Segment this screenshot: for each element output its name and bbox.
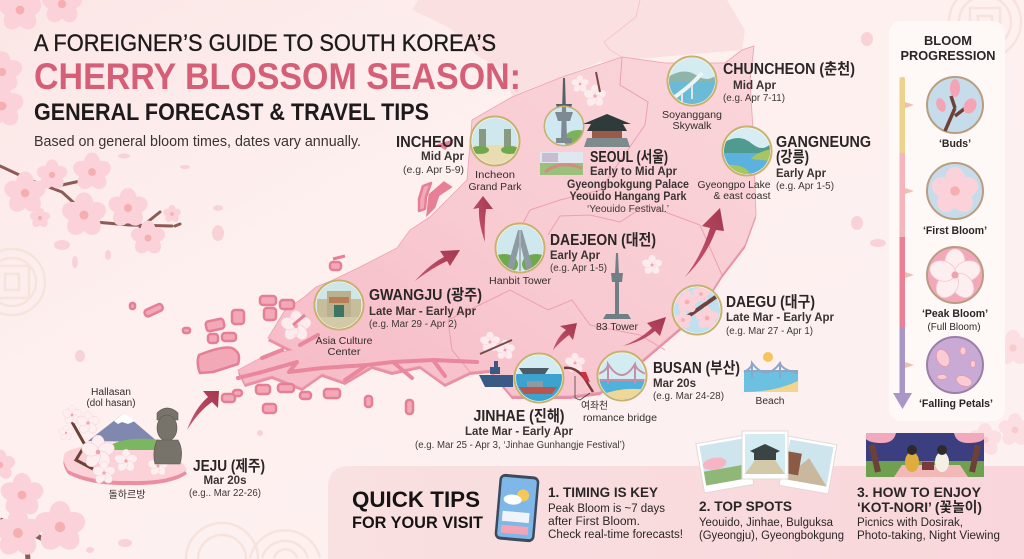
icon: Hallasan mountain [88, 413, 158, 442]
panel: quick tips [328, 431, 1024, 559]
title line 3: GENERAL FORECAST & TRAVEL TIPS [34, 99, 429, 126]
city: Gangneung: Early Apr [776, 168, 827, 180]
icon: cherry tree [72, 422, 95, 470]
icon: Asia Culture Center [314, 280, 364, 330]
icon: N Seoul Tower [544, 78, 584, 146]
city: Incheon: (e.g. Apr 5-9) [403, 165, 464, 176]
tip 1: timing: after First Bloom. [548, 516, 640, 528]
city: Gwangju: (e.g. Mar 29 - Apr 2) [369, 319, 457, 330]
blossoms: right edge [967, 330, 1024, 458]
city: Busan: (e.g. Mar 24-28) [653, 391, 724, 402]
city: Gangneung: (강릉) [776, 148, 809, 166]
city: Jeju: JEJU (제주) [193, 457, 265, 475]
city: Jeju: 돌하르방 [108, 488, 146, 501]
coast shadow [238, 49, 756, 399]
city: Chuncheon: Mid Apr [733, 80, 777, 92]
city: Jinhae: (e.g. Mar 25 - Apr 3, ‘Jinhae Gunhangje Festival’) [415, 440, 625, 451]
icon: Gyeongpo Lake [722, 126, 772, 176]
city: Seoul: Yeouido Hangang Park [570, 191, 687, 203]
tip 2: top spots: (Gyeongju), Gyeongbokgung [699, 530, 844, 542]
tip 2: top spots: Yeouido, Jinhae, Bulguksa [699, 517, 834, 529]
city: Incheon: Grand Park [468, 182, 523, 193]
landmark: Yeojwacheon romance bridge: romance bridge [583, 413, 657, 424]
landmark: 83 Tower [596, 253, 639, 333]
blossom on map [279, 75, 663, 374]
city: Jinhae: Late Mar - Early Apr [465, 426, 574, 438]
blossoms: top left [0, 0, 84, 129]
city: Chuncheon [662, 56, 855, 132]
cherry branch [0, 152, 182, 256]
blossoms: bottom left [0, 449, 88, 559]
city: Daejeon [489, 224, 656, 287]
tip 2: top spots: 2. TOP SPOTS [699, 498, 792, 514]
title line 2: CHERRY BLOSSOM SEASON: [34, 56, 521, 97]
map of South Korea [130, 0, 756, 414]
quick tips heading: QUICK TIPS [352, 487, 480, 512]
icon: Hanbit Tower [494, 222, 546, 274]
city: Seoul: SEOUL (서울) [590, 148, 668, 166]
title line 1: A FOREIGNER’S GUIDE TO SOUTH KOREA’S [34, 30, 496, 57]
tip 2: top spots [699, 498, 844, 542]
city: Jeju: (e.g.. Mar 22-26) [189, 488, 261, 499]
tip 1: timing: 1. TIMING IS KEY [548, 484, 659, 500]
city: Busan [598, 352, 798, 407]
decorative pattern: left medallion [0, 249, 45, 315]
city: Jeju: Mar 20s [204, 475, 246, 487]
tip 1: timing: Peak Bloom is ~7 days [548, 503, 665, 515]
city: Gangneung: & east coast [714, 191, 771, 202]
icon: Yeouido Hangang Park [540, 152, 583, 175]
stage: first bloom [923, 163, 987, 237]
decorative pattern: top right [949, 0, 1021, 58]
tip 3: kot-nori: 3. HOW TO ENJOY [857, 484, 982, 500]
city: Gwangju [314, 280, 482, 358]
city: Busan: BUSAN (부산) [653, 359, 740, 377]
city: Incheon: Mid Apr [421, 151, 465, 163]
city: Jeju: Hallasan [91, 387, 131, 398]
city: Seoul: ‘Yeouido Festival.’ [587, 204, 669, 215]
city: Chuncheon: CHUNCHEON (춘천) [723, 60, 855, 78]
stage: peak bloom: (Full Bloom) [928, 322, 980, 333]
city: Gangneung [698, 126, 871, 202]
city: Gwangju: Center [328, 347, 361, 358]
tip 3: kot-nori: Photo-taking, Night Viewing [857, 530, 1000, 542]
tip 1: timing: Check real-time forecasts! [548, 529, 683, 541]
arrows [187, 196, 724, 430]
icon: Gyeongbokgung Palace [583, 114, 631, 147]
city: Daegu [672, 285, 835, 337]
title [34, 30, 521, 150]
tip 3: kot-nori: ‘KOT-NORI’ (꽃놀이) [857, 499, 982, 515]
north faint land [412, 0, 745, 96]
panel heading [900, 34, 996, 63]
land [238, 46, 756, 396]
city: Gangneung: GANGNEUNG [776, 134, 871, 151]
tip 3: kot-nori [857, 484, 1000, 542]
falling petals [54, 32, 886, 553]
tip 1: timing [548, 484, 683, 541]
stage: buds: ‘Buds’ [939, 138, 971, 150]
icon: photos [696, 431, 837, 494]
city: Chuncheon: Skywalk [672, 121, 713, 132]
city: Jinhae [415, 354, 625, 451]
stage: falling petals: ‘Falling Petals’ [919, 398, 993, 410]
city: Incheon: INCHEON [396, 134, 464, 151]
timeline arrow [893, 77, 914, 409]
landmark: 83 Tower: 83 Tower [596, 322, 639, 333]
city: Busan: Beach [756, 396, 784, 407]
icon: beach [744, 352, 798, 392]
panel heading: BLOOM [924, 34, 972, 48]
city: Busan: Mar 20s [653, 378, 696, 390]
icon: Gwangan Bridge [598, 352, 646, 400]
stage: falling petals [919, 337, 993, 410]
icon: phone with forecast [494, 473, 540, 543]
tip 3: kot-nori: Picnics with Dosirak, [857, 517, 963, 529]
icon: cherry branch [672, 285, 722, 334]
landmark: Yeojwacheon romance bridge: 여좌천 [581, 400, 608, 412]
stage: buds [927, 77, 983, 150]
subtitle: Based on general bloom times, dates vary annually. [34, 133, 361, 150]
south coast bands [238, 335, 477, 380]
city: Gwangju: Asia Culture [316, 336, 373, 347]
city: Incheon: Incheon [475, 170, 515, 181]
city: Seoul: Early to Mid Apr [590, 166, 678, 178]
region borders [448, 0, 722, 372]
city: Gwangju: GWANGJU (광주) [369, 286, 482, 304]
city: Incheon [396, 116, 523, 193]
west coast inlets [293, 142, 450, 325]
city: Daejeon: Early Apr [550, 250, 601, 262]
city: Daejeon: Hanbit Tower [489, 276, 552, 287]
city: Seoul [540, 78, 689, 215]
icon: Jeju island [58, 405, 187, 485]
city: Jeju [58, 387, 265, 501]
stage: peak bloom: ‘Peak Bloom’ [922, 308, 988, 320]
panel heading: PROGRESSION [900, 49, 996, 63]
icon: dol hareubang statue [154, 408, 182, 464]
stage: first bloom: ‘First Bloom’ [923, 225, 987, 237]
quick tips heading [352, 487, 484, 532]
stage: peak bloom [922, 247, 988, 333]
city: Daegu: DAEGU (대구) [726, 293, 815, 311]
city: Daejeon: DAEJEON (대전) [550, 231, 656, 249]
icon: picnic night scene [866, 433, 984, 477]
islands [130, 183, 431, 414]
city: Jeju: (dol hasan) [86, 398, 136, 409]
icon: navy ship [479, 361, 513, 391]
city: Gangneung: Gyeongpo Lake [698, 180, 771, 191]
city: Seoul: Gyeongbokgung Palace [567, 179, 689, 191]
quick tips heading: FOR YOUR VISIT [352, 513, 484, 532]
city: Gangneung: (e.g. Apr 1-5) [776, 181, 834, 192]
city: Daejeon: (e.g. Apr 1-5) [550, 263, 607, 274]
city: Gwangju: Late Mar - Early Apr [369, 306, 477, 318]
city: Chuncheon: Soyanggang [662, 110, 722, 121]
icon: Soyanggang Skywalk [668, 56, 716, 106]
icon: Incheon Grand Park [470, 116, 520, 166]
city: Chuncheon: (e.g. Apr 7-11) [723, 93, 785, 104]
icon: Jinhae harbour [514, 354, 564, 402]
city: Daegu: (e.g. Mar 27 - Apr 1) [726, 326, 813, 337]
city: Daegu: Late Mar - Early Apr [726, 312, 835, 324]
landmark: Yeojwacheon romance bridge [564, 368, 657, 424]
panel: bloom progression [889, 21, 1005, 421]
decorative pattern: bottom waves [186, 523, 320, 559]
city: Jinhae: JINHAE (진해) [474, 407, 564, 425]
